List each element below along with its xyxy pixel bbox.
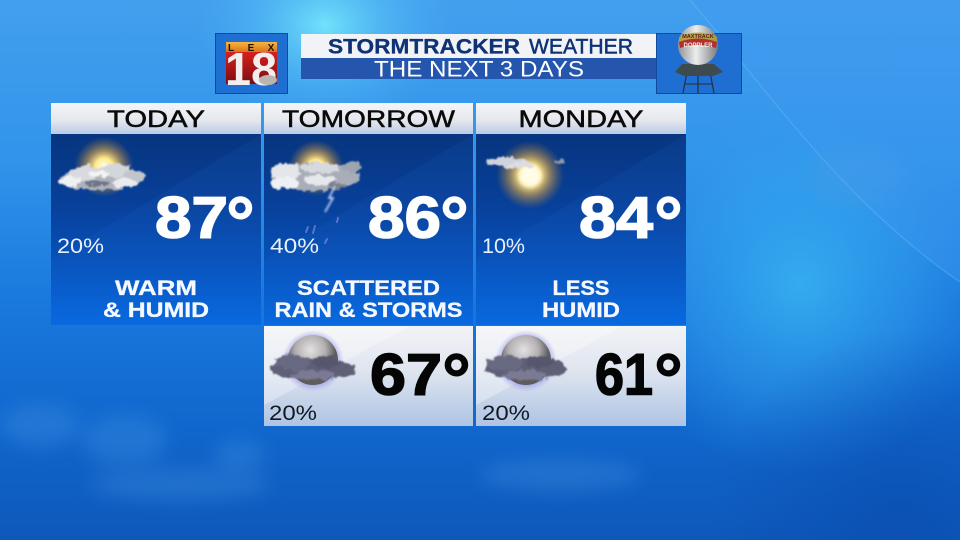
icon: moon and clouds xyxy=(484,330,568,392)
icon: moon and clouds xyxy=(271,330,355,392)
high temperature: 84 xyxy=(579,186,653,250)
forecast text: SCATTERED xyxy=(297,277,440,300)
low temperature xyxy=(595,340,683,420)
logo: LEX 18: E xyxy=(248,43,255,54)
icon: doppler radar tower: MAXTRACK xyxy=(682,34,714,40)
forecast text: HUMID xyxy=(542,299,620,322)
heading: tomorrow: TOMORROW xyxy=(282,106,455,133)
forecast text xyxy=(103,277,209,322)
banner xyxy=(216,25,742,95)
panel: tomorrow xyxy=(264,103,473,325)
icon: mostly sunny xyxy=(487,141,566,209)
icon: doppler radar tower xyxy=(656,25,742,94)
forecast text: RAIN & STORMS xyxy=(274,299,462,322)
rain chance: 20% xyxy=(57,235,104,258)
logo: LEX 18: L xyxy=(228,43,234,54)
forecast text: WARM xyxy=(115,277,197,300)
forecast text: LESS xyxy=(552,277,610,300)
panel: tomorrow night xyxy=(264,326,473,426)
high temperature: ° xyxy=(654,183,683,263)
high temperature: 87 xyxy=(155,186,228,250)
forecast text xyxy=(274,277,462,322)
rain chance: 10% xyxy=(482,235,525,258)
high temperature: 86 xyxy=(368,186,441,250)
rain chance: 40% xyxy=(270,235,319,258)
high temperature: ° xyxy=(440,183,469,263)
low temperature: ° xyxy=(442,340,471,420)
heading: monday: MONDAY xyxy=(518,106,644,133)
icon: sun behind cloud xyxy=(60,137,147,197)
low temperature: 61 xyxy=(595,342,653,408)
banner title bar: WEATHER xyxy=(529,36,633,58)
logo: LEX 18: X xyxy=(268,43,275,54)
low temperature xyxy=(370,340,471,420)
icon: thunderstorm cloud xyxy=(271,140,361,243)
heading: today xyxy=(51,103,261,134)
heading: today: TODAY xyxy=(107,106,205,133)
banner title bar xyxy=(301,34,657,82)
panel: monday night xyxy=(476,326,686,426)
heading: monday xyxy=(476,103,686,134)
logo: LEX 18 xyxy=(216,34,288,95)
low temperature: ° xyxy=(654,340,683,420)
banner title bar: STORMTRACKER xyxy=(328,36,520,58)
forecast text: & HUMID xyxy=(103,299,209,322)
icon: doppler radar tower: DOPPLER xyxy=(683,43,713,49)
rain chance: 20% xyxy=(482,402,530,425)
high temperature xyxy=(579,183,683,263)
logo: LEX 18: 18 xyxy=(225,43,277,95)
panel: monday xyxy=(476,103,686,325)
panel: today xyxy=(51,103,261,325)
forecast text xyxy=(542,277,620,322)
rain chance: 20% xyxy=(269,402,317,425)
high temperature: ° xyxy=(226,183,255,263)
high temperature xyxy=(155,183,255,263)
heading: tomorrow xyxy=(264,103,473,134)
banner title bar: THE NEXT 3 DAYS xyxy=(374,56,584,82)
high temperature xyxy=(368,183,469,263)
low temperature: 67 xyxy=(370,342,442,408)
